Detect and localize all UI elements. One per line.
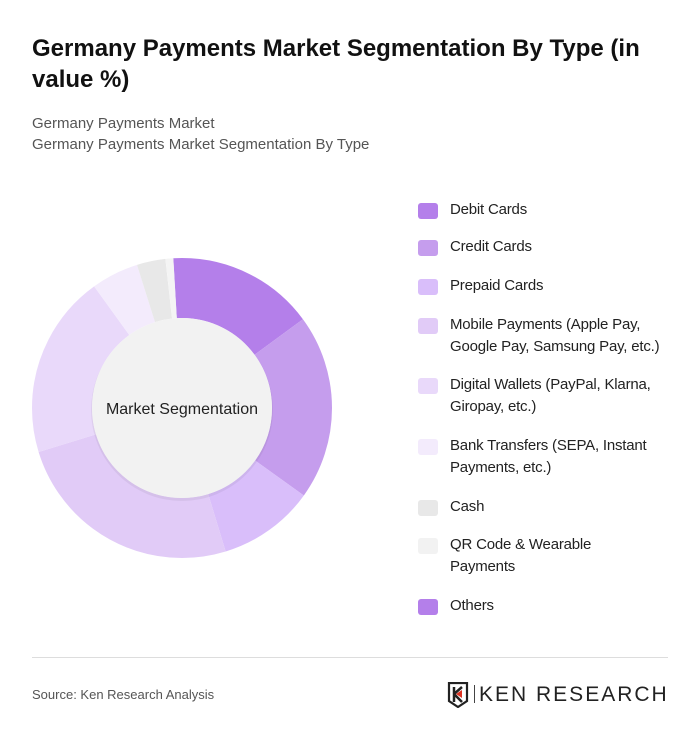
title: value %)	[32, 66, 129, 93]
legend: Debit Cards	[450, 201, 527, 218]
logo: KEN RESEARCH	[479, 683, 669, 706]
source: Source: Ken Research Analysis	[32, 687, 214, 702]
subtitle: Germany Payments Market Segmentation By Type	[32, 136, 369, 153]
donut chart: Market Segmentation	[106, 401, 258, 418]
legend: Cash	[450, 498, 484, 515]
legend	[418, 201, 659, 615]
legend: Payments, etc.)	[450, 459, 551, 476]
legend: Payments	[450, 558, 515, 575]
legend: QR Code & Wearable	[450, 536, 591, 553]
legend: Google Pay, Samsung Pay, etc.)	[450, 338, 659, 355]
legend: Prepaid Cards	[450, 277, 543, 294]
legend: Giropay, etc.)	[450, 398, 536, 415]
legend: Digital Wallets (PayPal, Klarna,	[450, 376, 651, 393]
legend: Others	[450, 597, 494, 614]
title: Germany Payments Market Segmentation By Type (in	[32, 35, 640, 62]
legend: Credit Cards	[450, 238, 532, 255]
subtitle: Germany Payments Market	[32, 115, 215, 132]
subtitle	[32, 115, 369, 153]
title	[32, 35, 640, 93]
legend: Mobile Payments (Apple Pay,	[450, 316, 640, 333]
legend: Bank Transfers (SEPA, Instant	[450, 437, 647, 454]
